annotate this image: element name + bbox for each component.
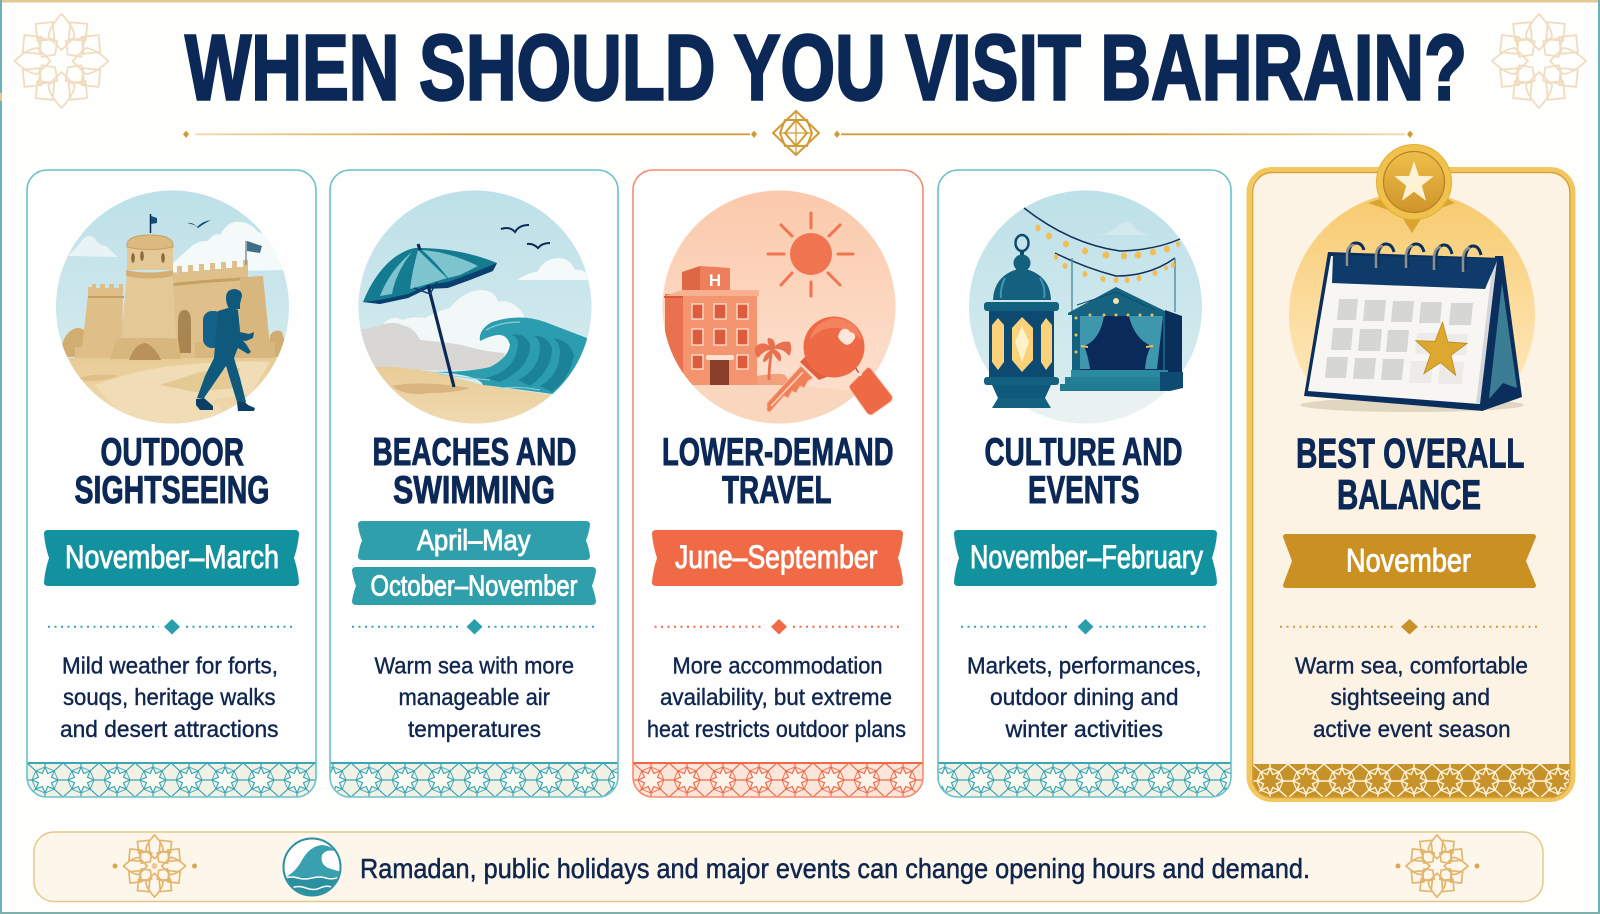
- panel: beaches and swimming: [330, 170, 618, 797]
- right wall: [173, 260, 275, 358]
- pattern band: [27, 762, 316, 797]
- ribbon: November: [1283, 534, 1536, 588]
- icon: sun: [768, 213, 853, 296]
- note text: Ramadan, public holidays and major events can change opening hours and demand.: [360, 853, 1310, 884]
- heading: SWIMMING: [393, 469, 555, 512]
- description: manageable air: [398, 684, 550, 710]
- icon: key and tag: [767, 316, 892, 415]
- description: availability, but extreme: [660, 684, 892, 710]
- ribbon: November: November: [1346, 542, 1471, 578]
- figure: hiker: [196, 289, 255, 411]
- heading: EVENTS: [1028, 469, 1140, 512]
- ornament: top-right flower: [1492, 14, 1586, 108]
- ribbon: November–March: November–March: [65, 539, 279, 575]
- panel: lower-demand travel: [633, 170, 923, 797]
- description: [374, 652, 574, 742]
- description: and desert attractions: [60, 716, 278, 742]
- description: Mild weather for forts,: [62, 652, 278, 678]
- heading: BEACHES AND: [372, 431, 576, 474]
- description: outdoor dining and: [990, 684, 1178, 710]
- description: [1295, 652, 1528, 742]
- description: Warm sea, comfortable: [1295, 652, 1528, 678]
- panel: culture and events: [938, 170, 1231, 797]
- dotted divider: [1280, 619, 1540, 634]
- ribbon: June–September: June–September: [675, 539, 878, 575]
- ribbon: October–November: October–November: [370, 570, 578, 602]
- illustration: fort and hiker: [56, 190, 290, 425]
- panel: outdoor sightseeing: [27, 170, 316, 797]
- description: Markets, performances,: [967, 652, 1202, 678]
- ribbon: November–February: [954, 530, 1217, 586]
- heading: BALANCE: [1337, 471, 1481, 518]
- icon: hotel: [664, 266, 759, 385]
- description: [60, 652, 278, 742]
- icon: palm tree: [755, 338, 791, 380]
- heading: OUTDOOR: [100, 431, 244, 474]
- illustration: umbrella and wave: [358, 190, 592, 425]
- icon: wave badge: [284, 838, 342, 900]
- description: winter activities: [1005, 716, 1163, 742]
- pattern band: [1252, 764, 1570, 798]
- description: [967, 652, 1202, 742]
- heading: [74, 431, 270, 512]
- heading: SIGHTSEEING: [74, 469, 270, 512]
- description: souqs, heritage walks: [63, 684, 276, 710]
- dotted divider: [961, 619, 1208, 634]
- heading: [662, 431, 894, 512]
- ornament: top-left flower: [14, 14, 108, 108]
- ribbon: April–May: [358, 521, 590, 560]
- title divider: [183, 111, 1413, 155]
- ribbon: November–March: [44, 530, 299, 586]
- heading: [984, 431, 1182, 512]
- pattern band: [633, 762, 923, 797]
- description: Warm sea with more: [374, 652, 574, 678]
- heading: CULTURE AND: [984, 431, 1182, 474]
- dotted divider: [654, 619, 900, 634]
- ribbon: November–February: November–February: [970, 539, 1204, 575]
- left wall: [75, 284, 123, 358]
- description: heat restricts outdoor plans: [647, 716, 906, 742]
- icon: beach umbrella: [363, 244, 497, 387]
- pattern band: [938, 762, 1231, 797]
- rubble: [60, 328, 286, 357]
- ribbon: June–September: [652, 530, 903, 586]
- ornament: footer right flower: [1396, 835, 1480, 897]
- footer note: [34, 832, 1543, 902]
- description: sightseeing and: [1330, 684, 1490, 710]
- ribbon: April–May: April–May: [417, 525, 531, 557]
- heading: TRAVEL: [722, 469, 832, 512]
- icon: lantern: [984, 235, 1059, 408]
- illustration: lantern and stage: [967, 190, 1205, 425]
- heading: LOWER-DEMAND: [662, 431, 894, 474]
- dotted divider: [48, 619, 294, 634]
- pattern band: [330, 762, 618, 797]
- illustration: calendar: [1289, 196, 1535, 412]
- string lights: [1024, 208, 1180, 312]
- panel: best overall balance: [1249, 144, 1573, 800]
- illustration: hotel, sun and key: [662, 190, 896, 425]
- icon: hotel: H: [709, 271, 721, 290]
- heading: [1296, 430, 1524, 518]
- description: temperatures: [408, 716, 541, 742]
- heading: [372, 431, 576, 512]
- dotted divider: [352, 619, 596, 634]
- icon: star medal: [1368, 144, 1455, 233]
- ornament: footer left flower: [112, 835, 197, 897]
- description: [647, 652, 906, 742]
- main tower: [121, 276, 176, 340]
- icon: stage: [1060, 287, 1183, 391]
- description: More accommodation: [672, 652, 882, 678]
- description: active event season: [1313, 716, 1510, 742]
